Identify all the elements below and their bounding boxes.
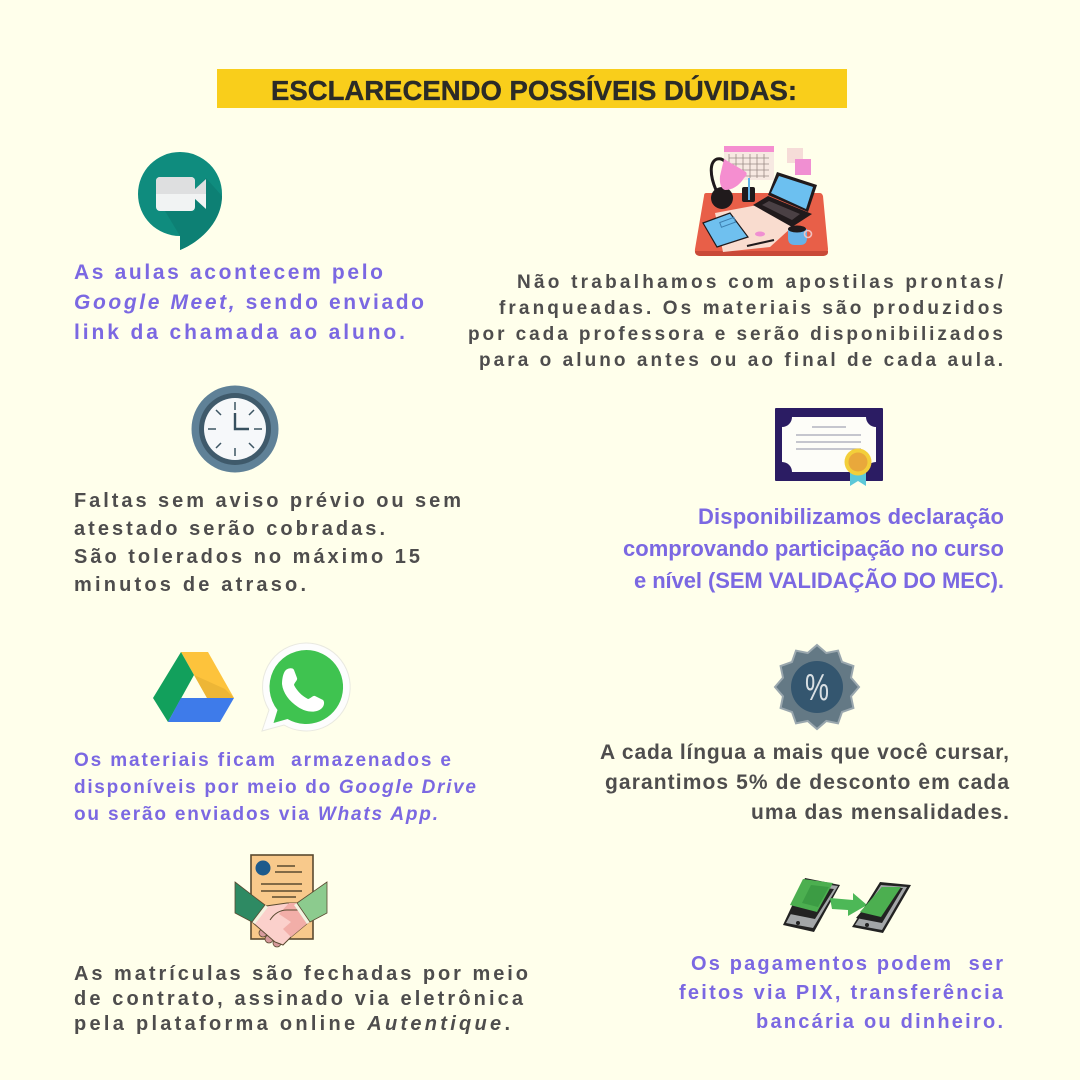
icon: desk with laptop (695, 146, 828, 256)
text: contract: pela plataforma online Autentique. (74, 1013, 510, 1035)
text: materials: para o aluno antes ou ao final de cada aula. (479, 350, 1003, 371)
icon: percent badge: % (805, 667, 829, 709)
text: google meet (74, 261, 424, 344)
text: certificate: e nível (SEM VALIDAÇÃO DO MEC). (634, 568, 1004, 593)
panel: absences (74, 386, 461, 596)
icon: phones money transfer (783, 878, 911, 933)
panel: certificate (623, 408, 1004, 593)
text: materials: por cada professora e serão disponibilizados (468, 324, 1003, 345)
text: materials: Não trabalhamos com apostilas prontas/ (517, 272, 1004, 293)
title banner: ESCLARECENDO POSSÍVEIS DÚVIDAS: (271, 75, 797, 106)
text: absences: Faltas sem aviso prévio ou sem (74, 490, 461, 512)
text: discount: garantimos 5% de desconto em cada (605, 771, 1009, 794)
panel: materials (468, 146, 1004, 371)
text: payments: Os pagamentos podem ser (691, 953, 1003, 975)
icon: google drive (153, 652, 234, 722)
text: payments: feitos via PIX, transferência (679, 982, 1004, 1004)
text: discount: A cada língua a mais que você cursar, (600, 741, 1009, 764)
text: drive and whatsapp: disponíveis por meio do Google Drive (74, 777, 476, 798)
text: payments (679, 953, 1004, 1033)
icon: certificate (775, 408, 883, 486)
icon: whatsapp (262, 643, 350, 731)
text: payments: bancária ou dinheiro. (756, 1011, 1003, 1033)
text: discount (600, 741, 1009, 824)
text: certificate: Disponibilizamos declaração (698, 504, 1004, 529)
title banner (217, 69, 847, 108)
panel: discount (600, 645, 1009, 824)
text: absences: atestado serão cobradas. (74, 518, 385, 540)
text: absences (74, 490, 461, 596)
panel: contract (74, 855, 528, 1035)
panel: payments (679, 878, 1004, 1033)
icon: google meet (138, 152, 222, 250)
text: discount: uma das mensalidades. (751, 801, 1009, 824)
text: drive and whatsapp (74, 750, 476, 825)
text: certificate (623, 504, 1004, 593)
icon: percent badge (775, 645, 859, 729)
panel: google meet classes (74, 152, 424, 344)
text: drive and whatsapp: ou serão enviados via Whats App. (74, 804, 438, 825)
panel: drive and whatsapp (74, 643, 476, 825)
text: contract: de contrato, assinado via eletrônica (74, 988, 524, 1010)
text: certificate: comprovando participação no curso (623, 536, 1004, 561)
text: absences: São tolerados no máximo 15 (74, 546, 420, 568)
text: drive and whatsapp: Os materiais ficam armazenados e (74, 750, 451, 771)
text: google meet: Google Meet, sendo enviado (74, 291, 424, 314)
text: contract (74, 963, 528, 1035)
icon: handshake contract (235, 855, 327, 947)
text: materials (468, 272, 1004, 371)
text: absences: minutos de atraso. (74, 574, 306, 596)
text: google meet: As aulas acontecem pelo (74, 261, 383, 284)
text: contract: As matrículas são fechadas por meio (74, 963, 528, 985)
text: materials: franqueadas. Os materiais são produzidos (499, 298, 1003, 319)
icon: clock (192, 386, 278, 472)
text: google meet: link da chamada ao aluno. (74, 321, 405, 344)
